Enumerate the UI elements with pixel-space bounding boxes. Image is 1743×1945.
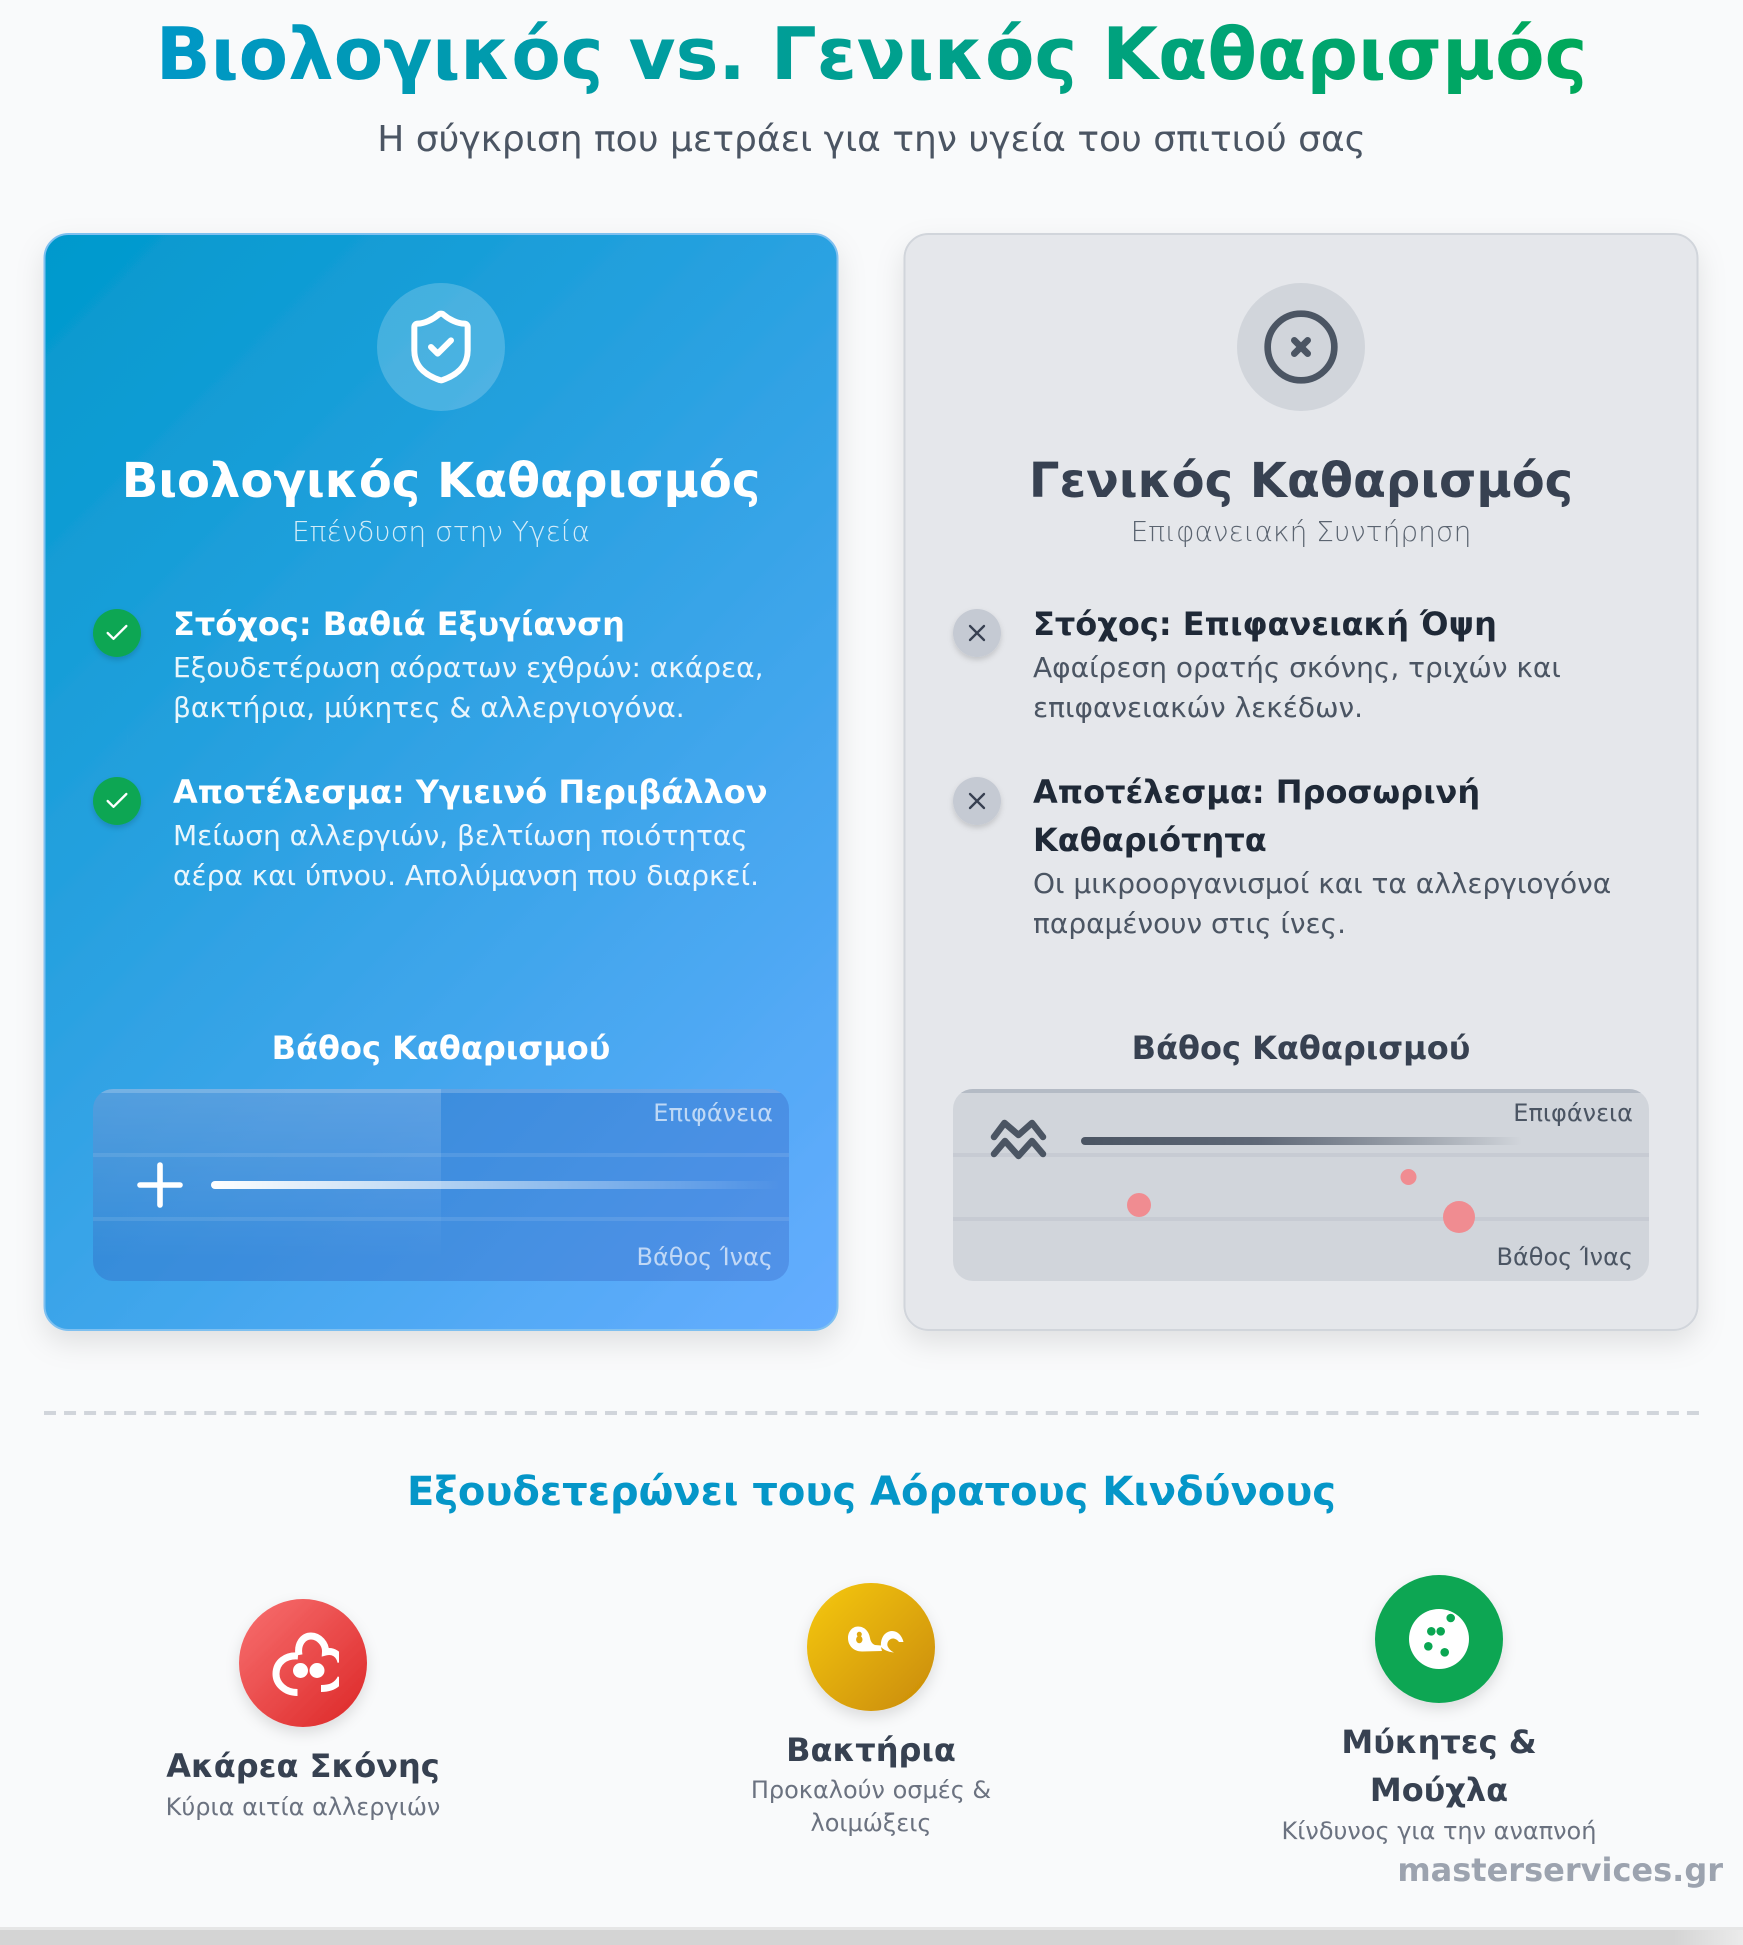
result text: Καθαριότητα	[1033, 821, 1267, 859]
panel heading: Γενικός Καθαρισμός	[1029, 453, 1573, 509]
icon: plus	[140, 1165, 180, 1205]
label: fibre depth: Βάθος Ίνας	[637, 1243, 773, 1271]
result text: Μείωση αλλεργιών, βελτίωση ποιότητας	[173, 819, 748, 852]
icon: shield check	[377, 283, 505, 411]
subtitle: Η σύγκριση που μετράει για την υγεία του σπιτιού σας	[377, 119, 1366, 160]
icon: bacteria	[807, 1583, 935, 1711]
section heading: Εξουδετερώνει τους Αόρατους Κινδύνους	[407, 1469, 1336, 1515]
icon: x 2	[953, 777, 1001, 825]
result text: Αποτέλεσμα: Προσωρινή	[1033, 773, 1480, 811]
goal text: Στόχος: Βαθιά Εξυγίανση	[173, 605, 625, 643]
goal text: Εξουδετέρωση αόρατων εχθρών: ακάρεα,	[173, 651, 764, 684]
watermark: masterservices.gr	[1397, 1851, 1723, 1889]
threat name: Μύκητες &	[1341, 1723, 1537, 1761]
threat: mould	[1282, 1575, 1596, 1845]
remaining particles	[1127, 1169, 1475, 1233]
penetration bar	[211, 1181, 781, 1189]
result text: Οι μικροοργανισμοί και τα αλλεργιογόνα	[1033, 867, 1611, 900]
panel subheading: Επένδυση στην Υγεία	[292, 515, 590, 548]
goal text: Στόχος: Επιφανειακή Όψη	[1033, 605, 1497, 643]
goal text	[1033, 605, 1561, 724]
depth heading: Βάθος Καθαρισμού	[1132, 1029, 1470, 1067]
goal text: βακτήρια, μύκητες & αλλεργιογόνα.	[173, 691, 685, 724]
threat: bacteria	[751, 1583, 991, 1837]
goal text: Αφαίρεση ορατής σκόνης, τριχών και	[1033, 651, 1561, 684]
threat description: Κίνδυνος για την αναπνοή	[1282, 1817, 1596, 1845]
icon: dust mite	[239, 1599, 367, 1727]
goal text	[173, 605, 764, 724]
result text	[173, 773, 768, 892]
icon: surface waves	[994, 1123, 1043, 1156]
threat description	[751, 1776, 991, 1837]
threat description: Κύρια αιτία αλλεργιών	[166, 1793, 440, 1821]
threat description: λοιμώξεις	[811, 1809, 931, 1837]
goal text: επιφανειακών λεκέδων.	[1033, 691, 1363, 724]
threat description: Προκαλούν οσμές &	[751, 1776, 991, 1804]
icon: circle x	[1237, 283, 1365, 411]
icon: check 2	[93, 777, 141, 825]
threat name: Βακτήρια	[786, 1731, 956, 1769]
result text	[1033, 773, 1611, 940]
threat: dust mites	[166, 1599, 440, 1821]
icon: check 1	[93, 609, 141, 657]
label: fibre depth: Βάθος Ίνας	[1497, 1243, 1633, 1271]
threat name	[1341, 1723, 1537, 1809]
icon: x 1	[953, 609, 1001, 657]
panel: general cleaning	[904, 234, 1698, 1330]
icon: mould	[1375, 1575, 1503, 1703]
panel heading: Βιολογικός Καθαρισμός	[122, 453, 760, 509]
threat name: Ακάρεα Σκόνης	[166, 1747, 440, 1785]
surface bar	[1081, 1137, 1522, 1145]
depth heading: Βάθος Καθαρισμού	[272, 1029, 610, 1067]
bottom edge band	[0, 1927, 1743, 1945]
label: surface: Επιφάνεια	[1513, 1099, 1633, 1127]
threat name: Μούχλα	[1370, 1771, 1508, 1809]
depth diagram	[953, 1089, 1649, 1281]
panel: biological cleaning	[44, 234, 838, 1330]
result text: αέρα και ύπνου. Απολύμανση που διαρκεί.	[173, 859, 759, 892]
title: Βιολογικός vs. Γενικός Καθαρισμός	[156, 12, 1587, 96]
panel subheading: Επιφανειακή Συντήρηση	[1131, 515, 1471, 548]
label: surface: Επιφάνεια	[653, 1099, 773, 1127]
result text: Αποτέλεσμα: Υγιεινό Περιβάλλον	[173, 773, 768, 811]
depth diagram	[93, 1089, 789, 1281]
result text: παραμένουν στις ίνες.	[1033, 907, 1346, 940]
